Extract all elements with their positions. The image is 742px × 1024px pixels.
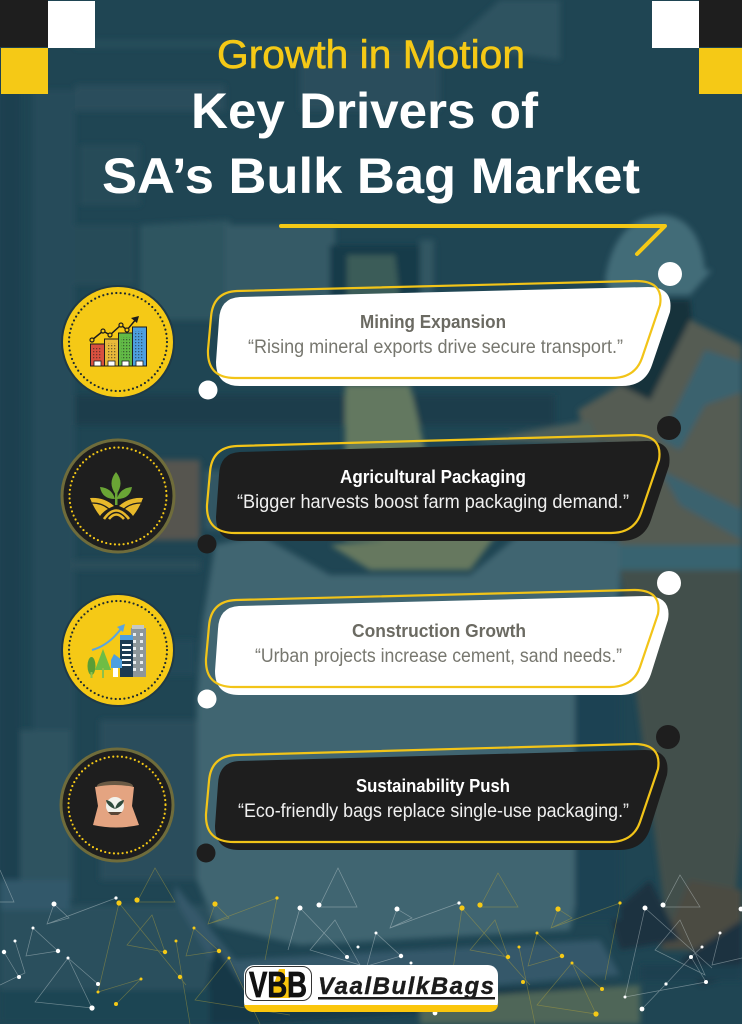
panel: Sustainability Push [196, 725, 680, 862]
heading: Mining Expansion [360, 312, 506, 332]
falling product [347, 255, 400, 300]
icon: plant sprout on fields [62, 440, 174, 552]
heading: Sustainability Push [356, 776, 510, 796]
worker [605, 215, 712, 295]
heading line 2: SA’s Bulk Bag Market [102, 148, 640, 204]
bulk bag [197, 530, 620, 945]
panel: Mining Expansion [198, 262, 682, 400]
corner blocks: top right [652, 0, 742, 94]
quote: “Eco-friendly bags replace single-use packaging.” [238, 801, 629, 822]
panel: Construction Growth [198, 571, 681, 708]
logo mark: VBB [249, 964, 307, 1005]
corner blocks: top left [0, 0, 95, 94]
icon: eco bag [61, 749, 173, 861]
logo: Vaal Bulk Bags [244, 964, 498, 1012]
yellow underline arrow [281, 226, 665, 254]
title [102, 33, 640, 204]
heading line 1: Key Drivers of [191, 83, 538, 139]
quote: “Urban projects increase cement, sand needs.” [255, 646, 622, 667]
icon: rising buildings chart [61, 285, 175, 399]
heading: Agricultural Packaging [340, 467, 526, 487]
decorative network of triangles and dots [0, 868, 742, 1024]
quote: “Rising mineral exports drive secure transport.” [248, 337, 623, 358]
floor and scale [0, 905, 210, 1024]
quote: “Bigger harvests boost farm packaging demand.” [237, 492, 629, 513]
subtitle: Growth in Motion: Growth in Motion [217, 33, 525, 77]
heading: Construction Growth [352, 621, 526, 641]
panel: Agricultural Packaging [198, 416, 681, 554]
logo wordmark: VaalBulkBags [318, 973, 495, 1000]
icon: growing city [61, 593, 175, 707]
